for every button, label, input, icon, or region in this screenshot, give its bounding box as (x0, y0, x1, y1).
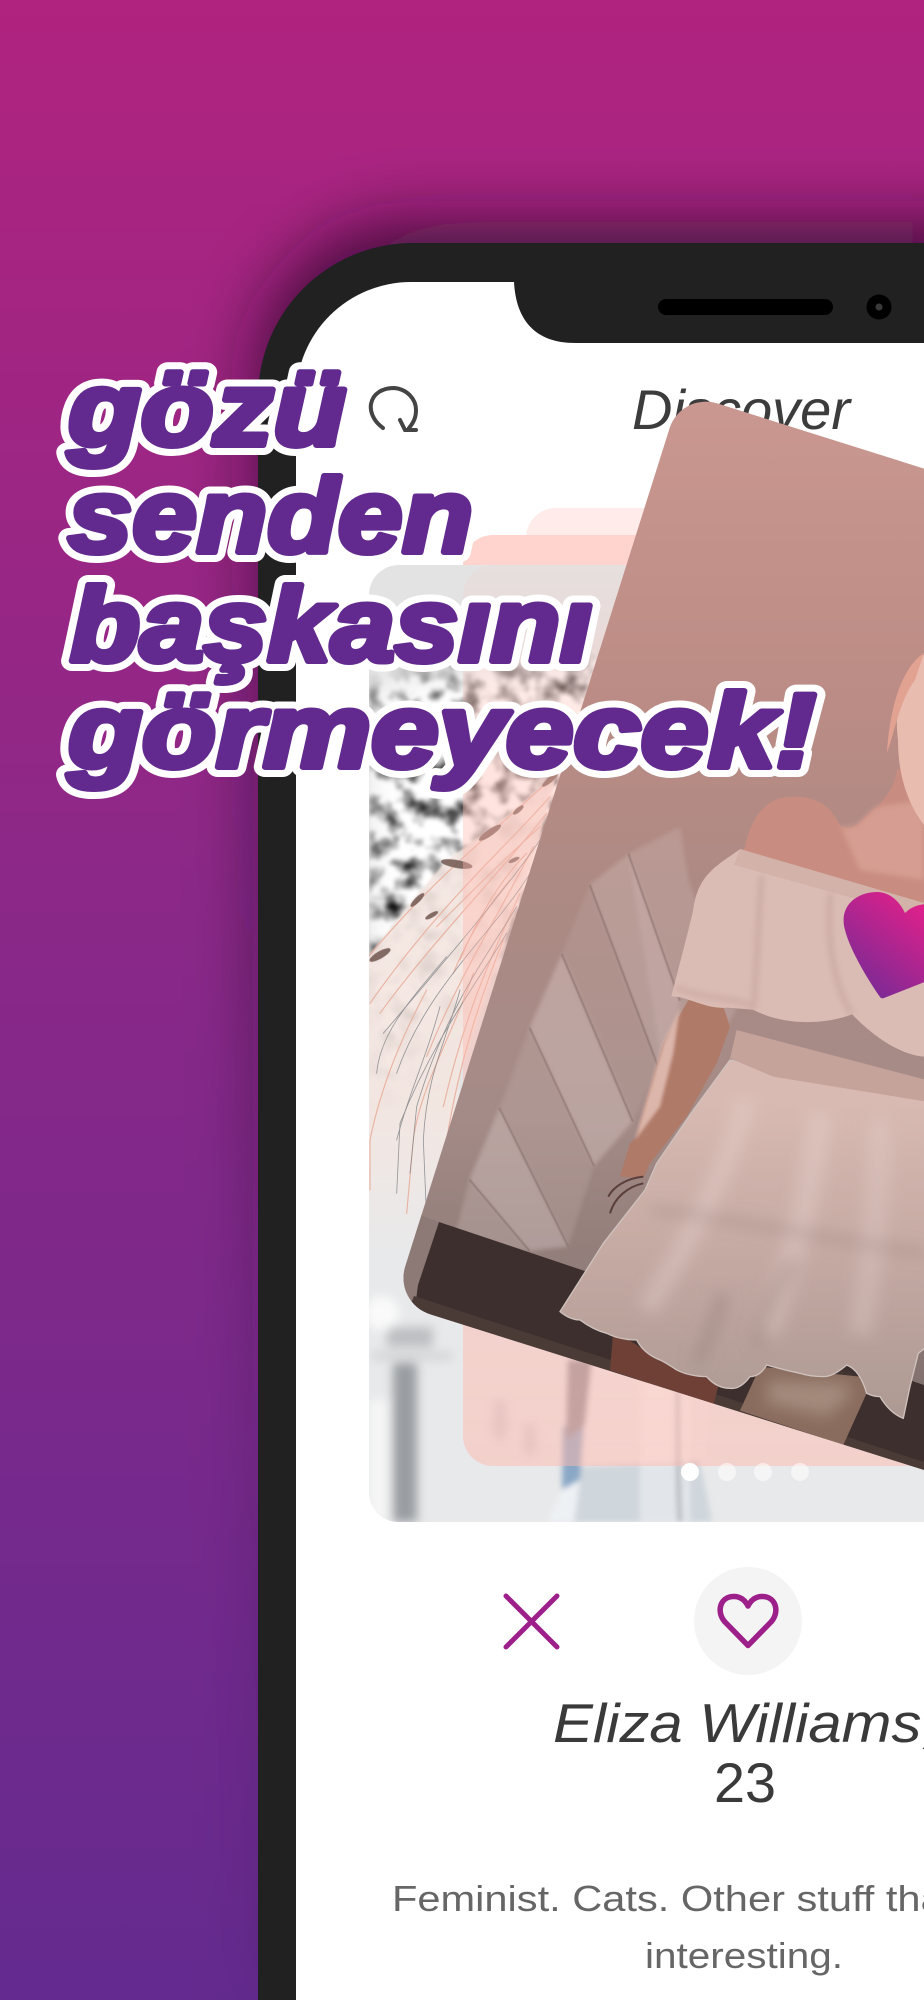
bracelet (608, 1177, 643, 1213)
neck highlight (840, 800, 924, 880)
headline fill: görmeyecek! (67, 673, 816, 790)
middle pink card top (463, 535, 636, 565)
front photo card, tilted (380, 380, 924, 1500)
icon: refresh (371, 388, 416, 430)
headline (67, 351, 816, 790)
woman's arm (620, 1000, 730, 1178)
dark bench (380, 1200, 924, 1500)
phone mockup (258, 243, 924, 2000)
headline outline: gözü (67, 351, 346, 468)
headline outline: senden (68, 458, 473, 575)
headline fill: senden (68, 458, 473, 575)
headline fill: gözü (67, 351, 346, 468)
photo: denim and hair (554, 1358, 712, 1522)
hair dark flecks (368, 772, 559, 964)
hair base (369, 778, 556, 1143)
heart sticker (844, 892, 924, 998)
woman's skin: shoulders and neck (740, 760, 924, 910)
photo: mottled trees (369, 654, 596, 1047)
pink translucent card (463, 565, 924, 1466)
camera (866, 294, 892, 320)
button circle (694, 1567, 802, 1675)
profile bio: interesting. (645, 1935, 843, 1976)
dress waist (730, 1030, 924, 1102)
screen title: Discover: Discover (632, 378, 852, 441)
profile bio (392, 1878, 924, 1976)
back pink card (526, 508, 644, 535)
wall slats (452, 827, 736, 1251)
pagination dots (681, 1463, 809, 1481)
dress ruffle (671, 849, 924, 1057)
phone body (258, 243, 924, 2000)
photo card stack (365, 508, 924, 1522)
hair salmon strands (368, 773, 557, 1213)
dress skirt (560, 1060, 924, 1418)
icon: heart outline (720, 1596, 776, 1646)
profile age: 23 (714, 1751, 776, 1814)
skirt folds (642, 1110, 885, 1356)
dislike button: X icon (506, 1596, 557, 1647)
headline fill (67, 351, 816, 790)
profile bio: Feminist. Cats. Other stuff that's (392, 1878, 924, 1919)
headline outline: başkasını (70, 567, 592, 684)
card base tint (380, 380, 924, 1480)
notch (514, 282, 924, 343)
photo: hair (369, 774, 558, 1214)
profile name: Eliza Williams, (553, 1692, 924, 1754)
headline fill: başkasını (70, 567, 592, 684)
phone screen (296, 282, 924, 2000)
grey photo card (365, 565, 924, 1522)
hair grey strands (377, 840, 540, 1220)
speaker (658, 299, 833, 315)
photo: lamp post (365, 1296, 536, 1522)
woman's face (897, 655, 924, 825)
woman's legs (610, 1330, 867, 1445)
like button (694, 1567, 802, 1675)
woman's hair (887, 653, 924, 753)
ruffle band (734, 849, 924, 918)
ruffle shading (676, 876, 852, 1014)
headline outline (67, 351, 816, 790)
phone drop shadow (253, 222, 924, 2000)
headline outline: görmeyecek! (67, 673, 816, 790)
photo: lower pale area (369, 1090, 924, 1522)
